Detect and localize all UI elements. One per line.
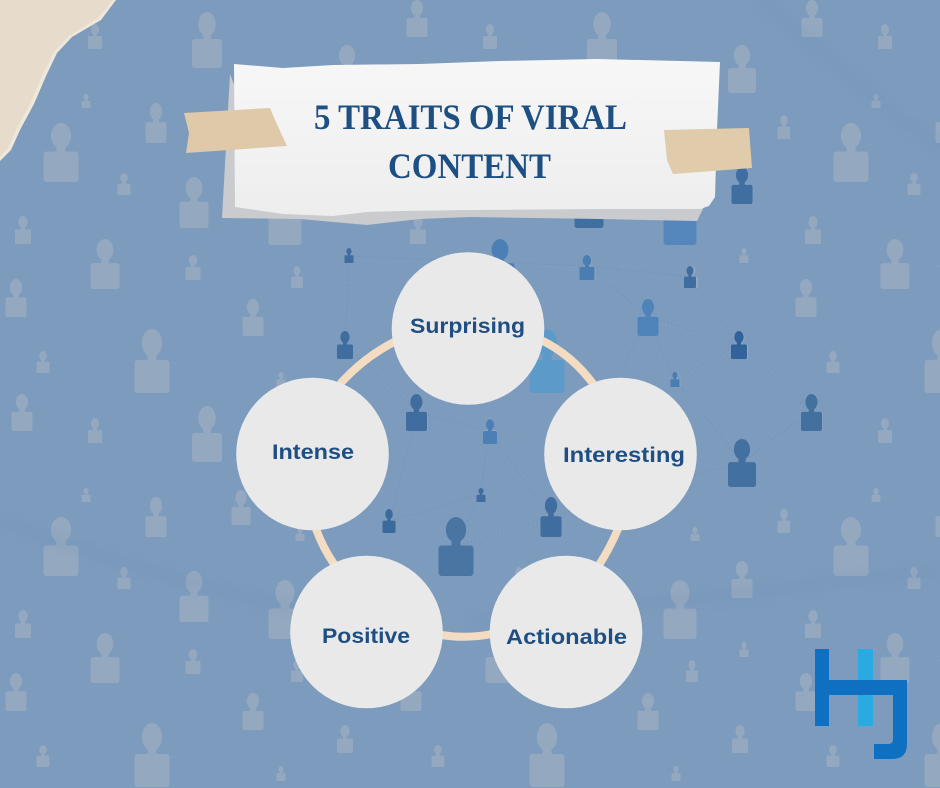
trait: Surprising: Surprising [410,315,525,338]
white crumpled paper [234,59,720,216]
torn beige paper corner [0,0,116,161]
title note paper [184,59,752,225]
trait: Intense: Intense [272,441,354,464]
tape: left [184,108,287,153]
trait: Interesting: Interesting [563,444,685,467]
tape: right [664,128,752,174]
logo: HJ monogram [815,649,907,759]
paper wrinkles [0,0,940,620]
trait: Actionable: Actionable [506,626,627,649]
paper shadow sheet [222,74,705,225]
trait: Surprising [392,252,544,405]
title text [314,97,627,186]
trait: Positive: Positive [322,625,410,648]
trait: Interesting [544,378,697,530]
trait: Actionable [490,556,642,708]
highlighted network of darker people [337,167,822,576]
connector ring between traits [316,340,618,637]
title text: 5 TRAITS OF VIRAL [314,97,627,137]
trait: Intense [236,378,389,530]
trait: Positive [290,556,443,708]
title text: CONTENT [388,146,551,186]
